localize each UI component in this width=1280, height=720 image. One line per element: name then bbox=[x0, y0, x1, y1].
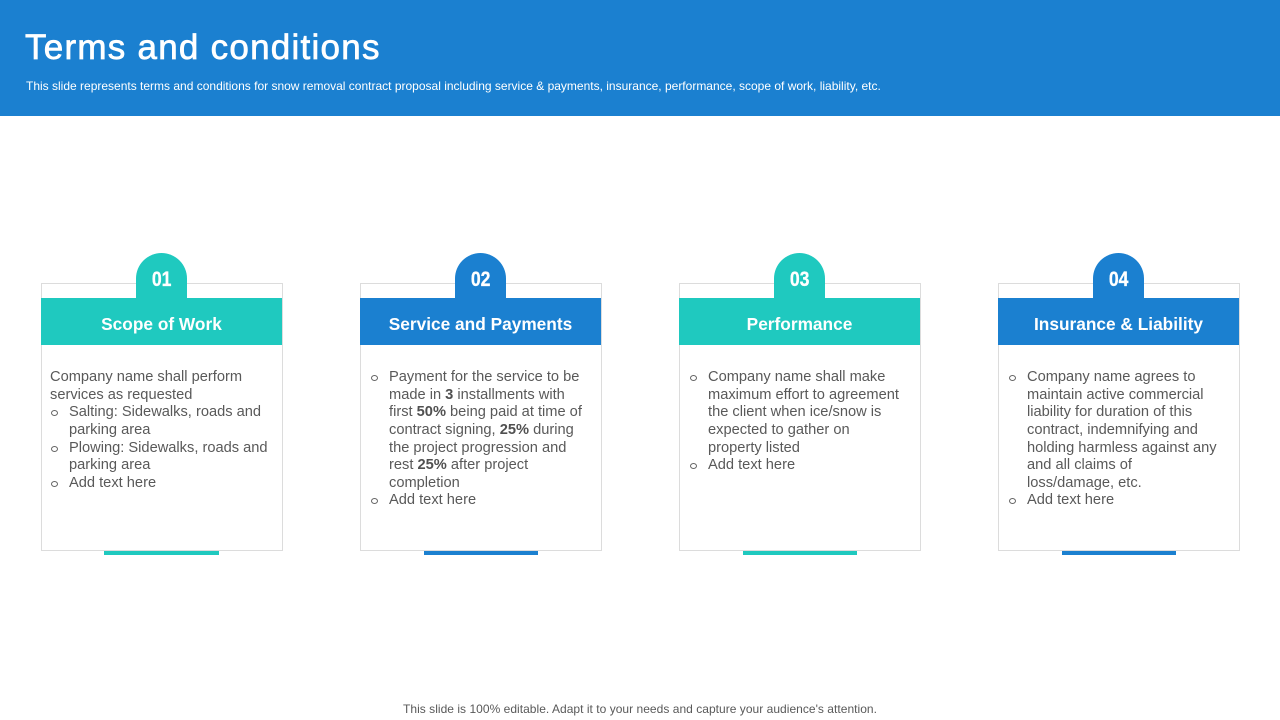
card text: expected to gather on bbox=[708, 422, 850, 438]
card text: rest 25% after project bbox=[389, 457, 528, 473]
number tab 04 bbox=[1093, 253, 1144, 299]
accent bar bbox=[1062, 551, 1176, 555]
card text: holding harmless against any bbox=[1027, 440, 1217, 456]
title: Terms and conditions bbox=[25, 28, 381, 67]
card text: Add text here bbox=[708, 457, 795, 473]
card text: Add text here bbox=[389, 492, 476, 508]
number tab 03 bbox=[774, 253, 825, 299]
card text bbox=[50, 369, 268, 491]
card text: maximum effort to agreement bbox=[708, 387, 899, 403]
card text bbox=[371, 369, 582, 508]
heading: scope of work: Scope of Work bbox=[101, 314, 222, 334]
card text: made in 3 installments with bbox=[389, 387, 565, 403]
number tab 02: 02 bbox=[471, 268, 490, 291]
card text: contract signing, 25% during bbox=[389, 422, 574, 438]
card text: Payment for the service to be bbox=[389, 369, 579, 385]
card text: Salting: Sidewalks, roads and bbox=[69, 404, 261, 420]
accent bar bbox=[424, 551, 538, 555]
footer note: This slide is 100% editable. Adapt it to your needs and capture your audience's attention. bbox=[403, 702, 877, 716]
card text: property listed bbox=[708, 440, 800, 456]
heading: insurance and liability bbox=[998, 298, 1239, 345]
accent bar bbox=[104, 551, 219, 555]
heading: service and payments: Service and Payments bbox=[389, 314, 572, 334]
card text: first 50% being paid at time of bbox=[389, 404, 582, 420]
accent bar bbox=[743, 551, 857, 555]
panel: performance bbox=[679, 253, 921, 555]
card text bbox=[1009, 369, 1217, 508]
number tab 03: 03 bbox=[790, 268, 809, 291]
card text: Plowing: Sidewalks, roads and bbox=[69, 440, 268, 456]
heading: service and payments bbox=[360, 298, 601, 345]
card text: loss/damage, etc. bbox=[1027, 475, 1142, 491]
panel: insurance and liability bbox=[998, 253, 1240, 555]
header banner bbox=[0, 0, 1280, 116]
card text: liability for duration of this bbox=[1027, 404, 1192, 420]
panel: service and payments bbox=[360, 253, 602, 555]
number tab 01 bbox=[136, 253, 187, 299]
card outline bbox=[679, 283, 921, 551]
card text: Company name shall perform bbox=[50, 369, 242, 385]
panel: scope of work bbox=[41, 253, 283, 555]
number tab 02 bbox=[455, 253, 506, 299]
card text: contract, indemnifying and bbox=[1027, 422, 1198, 438]
card text bbox=[690, 369, 899, 473]
card text: maintain active commercial bbox=[1027, 387, 1204, 403]
card text: the project progression and bbox=[389, 440, 566, 456]
card text: services as requested bbox=[50, 387, 192, 403]
card text: completion bbox=[389, 475, 460, 491]
card text: Add text here bbox=[69, 475, 156, 491]
card text: the client when ice/snow is bbox=[708, 404, 881, 420]
subtitle: This slide represents terms and conditions for snow removal contract proposal including service & payments, insurance, performance, scope of work, liability, etc. bbox=[26, 79, 881, 93]
heading: performance: Performance bbox=[747, 314, 852, 334]
card text: Company name shall make bbox=[708, 369, 885, 385]
heading: scope of work bbox=[41, 298, 282, 345]
card text: and all claims of bbox=[1027, 457, 1132, 473]
heading: insurance and liability: Insurance & Liability bbox=[1034, 314, 1203, 334]
heading: performance bbox=[679, 298, 920, 345]
number tab 01: 01 bbox=[152, 268, 171, 291]
card text: Company name agrees to bbox=[1027, 369, 1195, 385]
card outline bbox=[360, 283, 602, 551]
card text: parking area bbox=[69, 457, 150, 473]
number tab 04: 04 bbox=[1109, 268, 1128, 291]
card text: Add text here bbox=[1027, 492, 1114, 508]
card text: parking area bbox=[69, 422, 150, 438]
card outline bbox=[41, 283, 283, 551]
card outline bbox=[998, 283, 1240, 551]
